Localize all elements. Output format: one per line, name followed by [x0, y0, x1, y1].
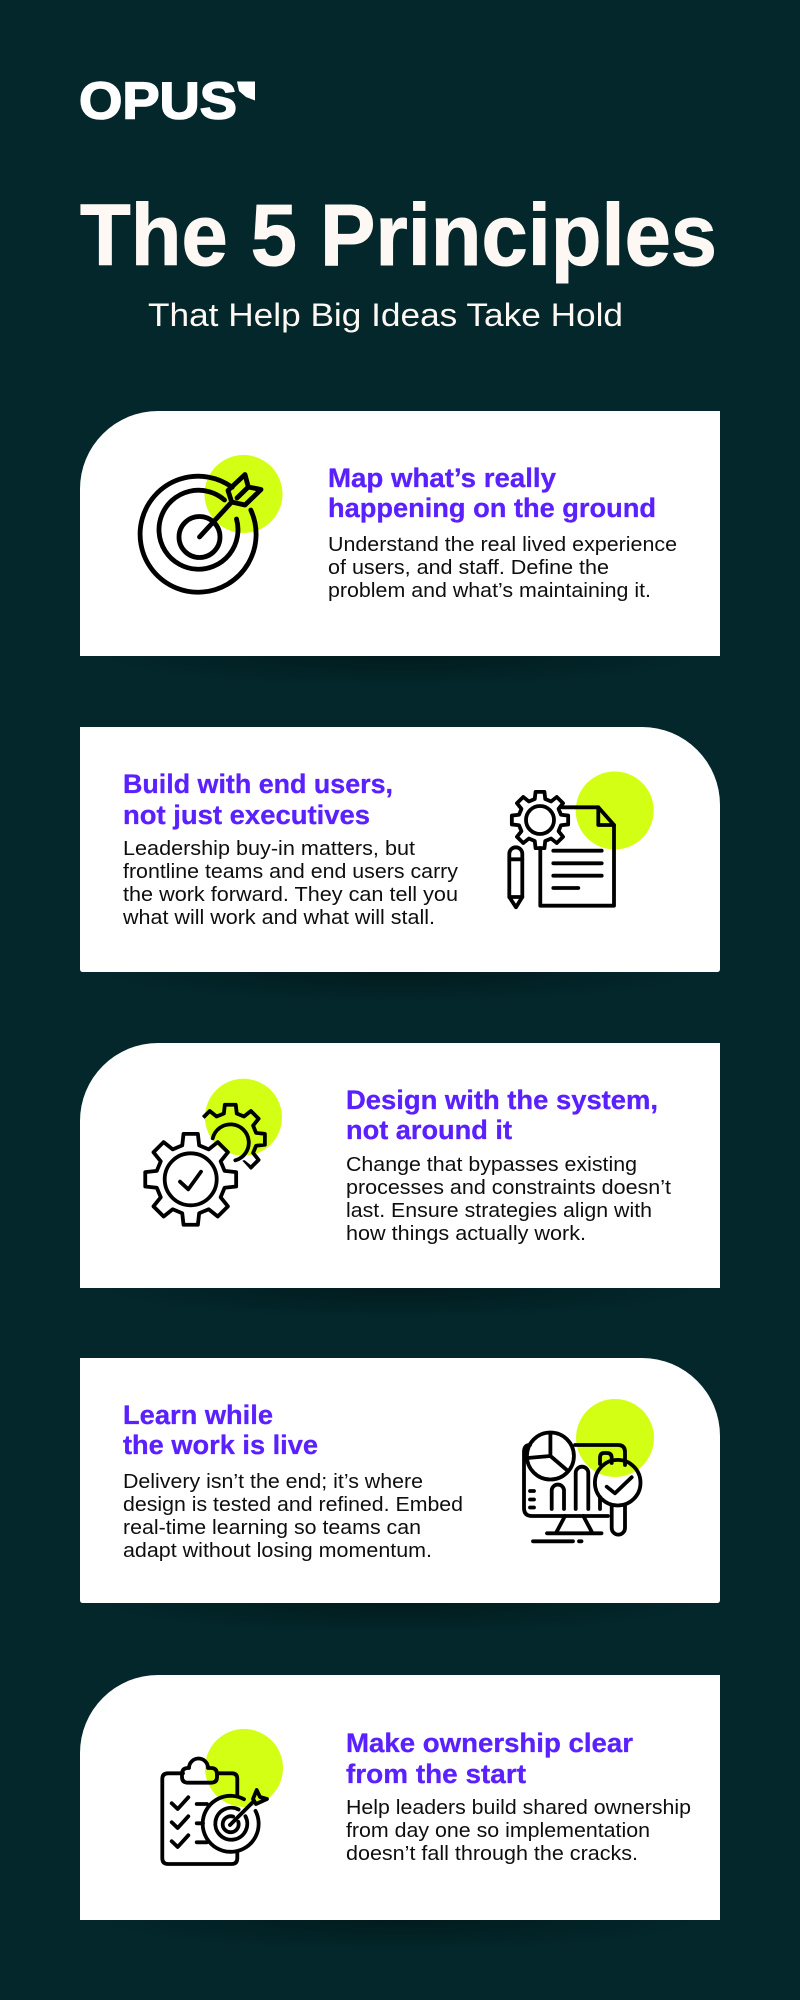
body text: design is tested and refined. Embed — [123, 1494, 463, 1516]
heading: happening on the ground — [328, 493, 656, 523]
heading — [328, 463, 656, 523]
body text — [346, 1797, 691, 1865]
body text: real-time learning so teams can — [123, 1517, 421, 1539]
accent circle — [576, 1399, 654, 1477]
body text: what will work and what will stall. — [122, 907, 435, 929]
body text: Help leaders build shared ownership — [346, 1797, 691, 1819]
body text: adapt without losing momentum. — [123, 1540, 432, 1562]
body text: from day one so implementation — [346, 1820, 650, 1842]
heading: Make ownership clear — [346, 1728, 633, 1758]
heading: Learn while — [123, 1400, 273, 1430]
heading — [123, 769, 393, 830]
heading: Design with the system, — [346, 1085, 658, 1115]
panel: principle 2 — [80, 727, 720, 972]
heading: not just executives — [123, 800, 370, 830]
accent circle — [205, 1729, 283, 1807]
icon: target with arrow — [140, 474, 261, 592]
accent circle — [204, 455, 282, 533]
body text: Change that bypasses existing — [346, 1154, 637, 1176]
logo: OPUS: OPUS — [79, 72, 237, 130]
panel: principle 5 — [80, 1675, 720, 1920]
body text: the work forward. They can tell you — [123, 884, 458, 906]
accent circle — [205, 1079, 282, 1156]
body text: of users, and staff. Define the — [328, 557, 609, 579]
icon: clipboard with checklist and target — [162, 1759, 267, 1864]
body text — [346, 1154, 671, 1245]
body text: Leadership buy-in matters, but — [123, 838, 415, 860]
accent circle — [576, 772, 654, 850]
body text — [328, 534, 677, 602]
body text: frontline teams and end users carry — [123, 861, 458, 883]
body text: last. Ensure strategies align with — [346, 1200, 652, 1222]
body text — [123, 1471, 463, 1562]
panel: principle 3 — [80, 1043, 720, 1288]
heading: from the start — [346, 1759, 526, 1789]
heading — [346, 1728, 633, 1789]
body text: problem and what’s maintaining it. — [328, 580, 651, 602]
panel: principle 1 — [80, 411, 720, 656]
panel: principle 4 — [80, 1358, 720, 1603]
title: The 5 Principles — [80, 187, 717, 284]
body text: Delivery isn’t the end; it’s where — [123, 1471, 423, 1493]
heading: not around it — [346, 1115, 512, 1145]
body text — [122, 838, 458, 929]
body text: Understand the real lived experience — [328, 534, 677, 556]
body text: doesn’t fall through the cracks. — [346, 1843, 638, 1865]
body text: processes and constraints doesn’t — [346, 1177, 671, 1199]
body text: how things actually work. — [346, 1223, 586, 1245]
icon: two gears with check — [145, 1105, 265, 1225]
heading: Map what’s really — [328, 463, 556, 493]
subtitle: That Help Big Ideas Take Hold — [148, 297, 623, 333]
icon: monitor with charts and magnifier — [524, 1432, 640, 1541]
icon: gear, document and pencil — [509, 792, 614, 907]
heading: the work is live — [123, 1430, 318, 1460]
heading — [123, 1400, 318, 1460]
heading: Build with end users, — [123, 769, 393, 799]
heading — [346, 1085, 658, 1145]
